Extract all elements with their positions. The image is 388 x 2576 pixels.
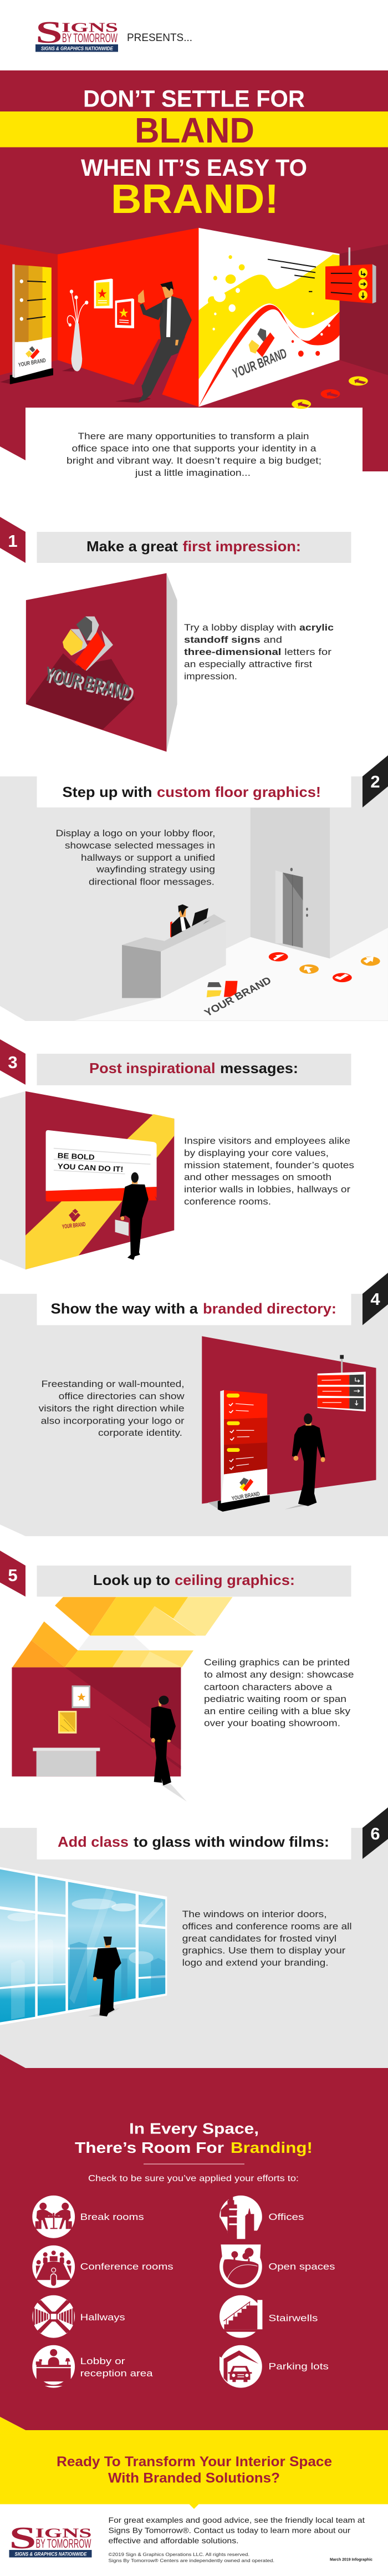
wall logo (231, 328, 289, 382)
illustration: window films (0, 1867, 167, 2025)
label: lobby: Lobby or (80, 2356, 125, 2366)
hanging directory sign (318, 1355, 366, 1411)
wall (12, 1668, 181, 1776)
section 2 heading (37, 776, 351, 807)
section 1 heading: first impression: (183, 538, 301, 555)
section 2 number tab (363, 755, 388, 807)
section 5 heading: ceiling graphics: (175, 1572, 295, 1588)
panel: section 2 band (0, 776, 388, 1021)
section 6 number tab (363, 1807, 388, 1859)
man looking up (150, 1696, 187, 1802)
message board (46, 1130, 157, 1202)
checklist intro: Check to be sure you’ve applied your efforts to: (88, 2174, 299, 2183)
table (33, 1747, 100, 1776)
clouds and skyline (7, 1888, 165, 2020)
section 5 text: over your boating showroom. (204, 1718, 340, 1729)
intro text: just a little imagination... (135, 468, 251, 478)
yellow wave (198, 255, 339, 379)
section 6 text: offices and conference rooms are all (182, 1921, 352, 1932)
logo: footer: SIGNS & GRAPHICS NATIONWIDE (14, 2551, 87, 2558)
section 4 text (39, 1379, 185, 1438)
wall lines (268, 260, 316, 292)
copyright: Signs By Tomorrow® Centers are independently owned and operated. (109, 2558, 274, 2563)
copyright: ©2019 Sign & Graphics Operations LLC. All rights reserved. (109, 2552, 249, 2557)
3D logo: YOUR BRAND (44, 664, 136, 706)
logo: Signs By Tomorrow: SIGNS & GRAPHICS NATIONWIDE (41, 45, 114, 52)
footer text: For great examples and good advice, see the friendly local team at (109, 2516, 365, 2524)
section 3 heading: messages: (220, 1060, 298, 1076)
label: parking lots: Parking lots (268, 2361, 329, 2371)
illustration: branded directory (202, 1336, 376, 1512)
section 5 text: to almost any design: showcase (204, 1669, 354, 1680)
section 1 text: three-dimensional letters for (184, 647, 331, 657)
intro text: There are many opportunities to transform a plain (78, 431, 309, 441)
section 6 number tab: 6 (370, 1824, 380, 1843)
logo: footer: IGNS (35, 2527, 92, 2541)
message board: BE BOLD (57, 1151, 95, 1161)
logo: footer (9, 2521, 92, 2558)
wave dots (208, 255, 330, 357)
icon: parking lots (219, 2345, 262, 2388)
section 3 text: and other messages on smooth (184, 1172, 331, 1182)
footer text: Signs By Tomorrow®. Contact us today to learn more about our (109, 2526, 350, 2535)
section 5 text (204, 1657, 354, 1729)
label: offices: Offices (268, 2212, 304, 2222)
logo: Signs By Tomorrow: S (35, 16, 63, 50)
label: lobby: reception area (80, 2369, 154, 2379)
section 4 number tab (363, 1273, 388, 1325)
icon: break rooms (32, 2196, 75, 2238)
section 2 text: showcase selected messages in (65, 840, 215, 851)
section 6 text: great candidates for frosted vinyl (182, 1933, 336, 1944)
small logo: YOUR BRAND (62, 1221, 86, 1230)
logo: Signs By Tomorrow: IGNS (62, 21, 118, 35)
section 6 heading: to glass with window films: (134, 1833, 329, 1850)
checklist heading: There’s Room For (75, 2139, 224, 2156)
section 4 text: office directories can show (59, 1391, 185, 1401)
footer text: effective and affordable solutions. (109, 2536, 238, 2545)
intro text (67, 431, 321, 478)
section 6 text: logo and extend your branding. (182, 1958, 329, 1968)
glass panes (0, 1869, 165, 2023)
label: open spaces: Open spaces (268, 2262, 335, 2272)
3D logo: YOUR BRAND (42, 662, 132, 703)
illustration: acrylic logo display (26, 573, 177, 752)
section 3 text: mission statement, founder’s quotes (184, 1160, 354, 1170)
logo: footer: BY TOMORROW (35, 2537, 91, 2550)
floor arrows (292, 376, 368, 409)
standee directory (0, 265, 53, 384)
call to action heading: Ready To Transform Your Interior Space (57, 2454, 332, 2470)
section 1 text: impression. (184, 671, 237, 682)
small logo (62, 1209, 86, 1230)
vase with stems (62, 289, 88, 372)
freestanding directory: YOUR BRAND (231, 1491, 261, 1502)
section 4 text: corporate identity. (98, 1427, 182, 1438)
footer text (109, 2516, 365, 2545)
section 4 heading: branded directory: (203, 1300, 336, 1317)
section 4 text: also incorporating your logo or (41, 1415, 185, 1426)
section 1 text: standoff signs and (184, 634, 282, 645)
message board: YOU CAN DO IT! (57, 1162, 124, 1173)
freestanding directory (208, 1390, 270, 1512)
section 2 text: Display a logo on your lobby floor, (55, 828, 215, 839)
window frame (0, 1867, 167, 2025)
icon: conference rooms (32, 2245, 75, 2288)
section 2 number tab: 2 (370, 772, 380, 791)
section 3 number tab: 3 (8, 1053, 18, 1072)
panel: call to action (0, 2417, 388, 2509)
label: stairwells: Stairwells (268, 2314, 318, 2324)
section 6 text: The windows on interior doors, (182, 1909, 327, 1919)
section 4 text: visitors the right direction while (39, 1403, 185, 1414)
panel: section 6 band (0, 1828, 388, 2068)
hanging sign (325, 247, 376, 303)
section 5 heading (37, 1566, 351, 1597)
title: BRAND! (111, 176, 279, 222)
section 3 text (184, 1136, 354, 1207)
panel: section 4 band (0, 1294, 388, 1536)
section 2 heading: custom floor graphics! (157, 784, 321, 800)
section 4 text: Freestanding or wall-mounted, (42, 1379, 185, 1389)
section 6 text (182, 1909, 352, 1968)
section 5 number tab (0, 1551, 25, 1597)
section 3 text: Inspire visitors and employees alike (184, 1136, 350, 1146)
section 1 text: Try a lobby display with acrylic (184, 622, 334, 633)
standee directory: YOUR BRAND (18, 358, 46, 369)
section 5 text: an entire ceiling with a blue sky (204, 1706, 351, 1716)
section 1 heading (37, 532, 351, 563)
section 2 text (55, 828, 215, 887)
section 5 number tab: 5 (8, 1566, 18, 1585)
panel: every space checklist (0, 2054, 388, 2430)
section 2 heading: Step up with (62, 784, 152, 800)
intro text: office space into one that supports your identity in a (72, 443, 316, 454)
logo: footer: S (9, 2521, 37, 2555)
framed pictures (94, 278, 134, 328)
floor logo: YOUR BRAND (202, 974, 274, 1019)
hero illustration: branded lobby (0, 228, 388, 409)
red wave (198, 305, 339, 407)
framed pictures (58, 1685, 90, 1734)
ceiling panels (12, 1597, 233, 1668)
presents label: PRESENTS... (127, 32, 192, 44)
section 1 text (184, 622, 334, 682)
white branded wall (198, 228, 339, 407)
reception desk (122, 914, 226, 998)
man from behind (284, 1414, 325, 1510)
section 3 text: by displaying your core values, (184, 1148, 329, 1158)
section 3 text: conference rooms. (184, 1196, 271, 1207)
title: DON’T SETTLE FOR (83, 85, 305, 112)
businessman leaning (115, 281, 192, 403)
section 5 text: pediatric waiting room or span (204, 1694, 346, 1704)
3D logo (42, 616, 136, 706)
wall logo: YOUR BRAND (231, 346, 289, 382)
section 5 heading: Look up to (93, 1572, 170, 1588)
icon: offices (219, 2196, 262, 2239)
section 6 heading (37, 1828, 351, 1859)
title: WHEN IT’S EASY TO (81, 155, 307, 181)
section 5 text: cartoon characters above a (204, 1681, 333, 1692)
title: BLAND (135, 110, 254, 150)
label: break rooms: Break rooms (80, 2212, 144, 2222)
section 6 heading: Add class (58, 1833, 129, 1850)
illustration: ceiling graphics (12, 1597, 233, 1802)
icon: lobby or reception (32, 2345, 75, 2388)
left wall (0, 244, 58, 375)
copyright (109, 2552, 274, 2563)
elevator (275, 868, 308, 948)
section 6 text: graphics. Use them to display your (182, 1945, 346, 1956)
floor arrows (269, 952, 380, 982)
call to action heading (57, 2454, 332, 2486)
icon: stairwells (219, 2295, 262, 2338)
label: conference rooms: Conference rooms (80, 2262, 173, 2272)
section 2 text: wayfinding strategy using (96, 864, 215, 875)
label: lobby (80, 2356, 154, 2379)
section 1 text: an especially attractive first (184, 659, 312, 669)
icon: open spaces (219, 2244, 262, 2288)
section 4 heading: Show the way with a (51, 1300, 198, 1317)
illustration: lobby floor graphics (74, 807, 388, 1020)
logo: Signs By Tomorrow: BY TOMORROW (62, 31, 118, 45)
checklist heading: In Every Space, (129, 2120, 259, 2137)
man with briefcase (115, 1172, 149, 1260)
yellow title band (0, 111, 388, 148)
title (81, 85, 307, 222)
right wall (339, 244, 388, 375)
section 3 heading: Post inspirational (89, 1060, 215, 1076)
logo: Signs By Tomorrow (35, 16, 118, 52)
panel: hero background (0, 70, 388, 471)
section 5 text: Ceiling graphics can be printed (204, 1657, 350, 1668)
illustration: inspirational wall message (0, 1091, 174, 1269)
red wall (58, 228, 198, 407)
section 4 number tab: 4 (370, 1289, 380, 1309)
call to action heading: With Branded Solutions? (108, 2471, 280, 2486)
label: hallways: Hallways (80, 2313, 125, 2323)
date note: March 2019 Infographic (330, 2558, 372, 2562)
icon: hallways (32, 2295, 75, 2338)
section 2 text: directional floor messages. (89, 876, 215, 887)
checklist heading: Branding! (231, 2139, 313, 2156)
section 4 heading (37, 1294, 351, 1325)
receptionist (170, 905, 208, 939)
intro text: bright and vibrant way. It doesn’t require a big budget; (67, 455, 321, 466)
section 2 text: hallways or support a unified (81, 852, 215, 863)
section 3 number tab (0, 1039, 25, 1085)
section 3 text: interior walls in lobbies, hallways or (184, 1184, 350, 1195)
section 1 heading: Make a great (86, 538, 178, 555)
man at window (88, 1937, 121, 2016)
checklist heading (75, 2120, 313, 2156)
section 3 heading (37, 1054, 351, 1085)
section 1 number tab: 1 (8, 531, 18, 551)
section 1 number tab (0, 517, 25, 563)
